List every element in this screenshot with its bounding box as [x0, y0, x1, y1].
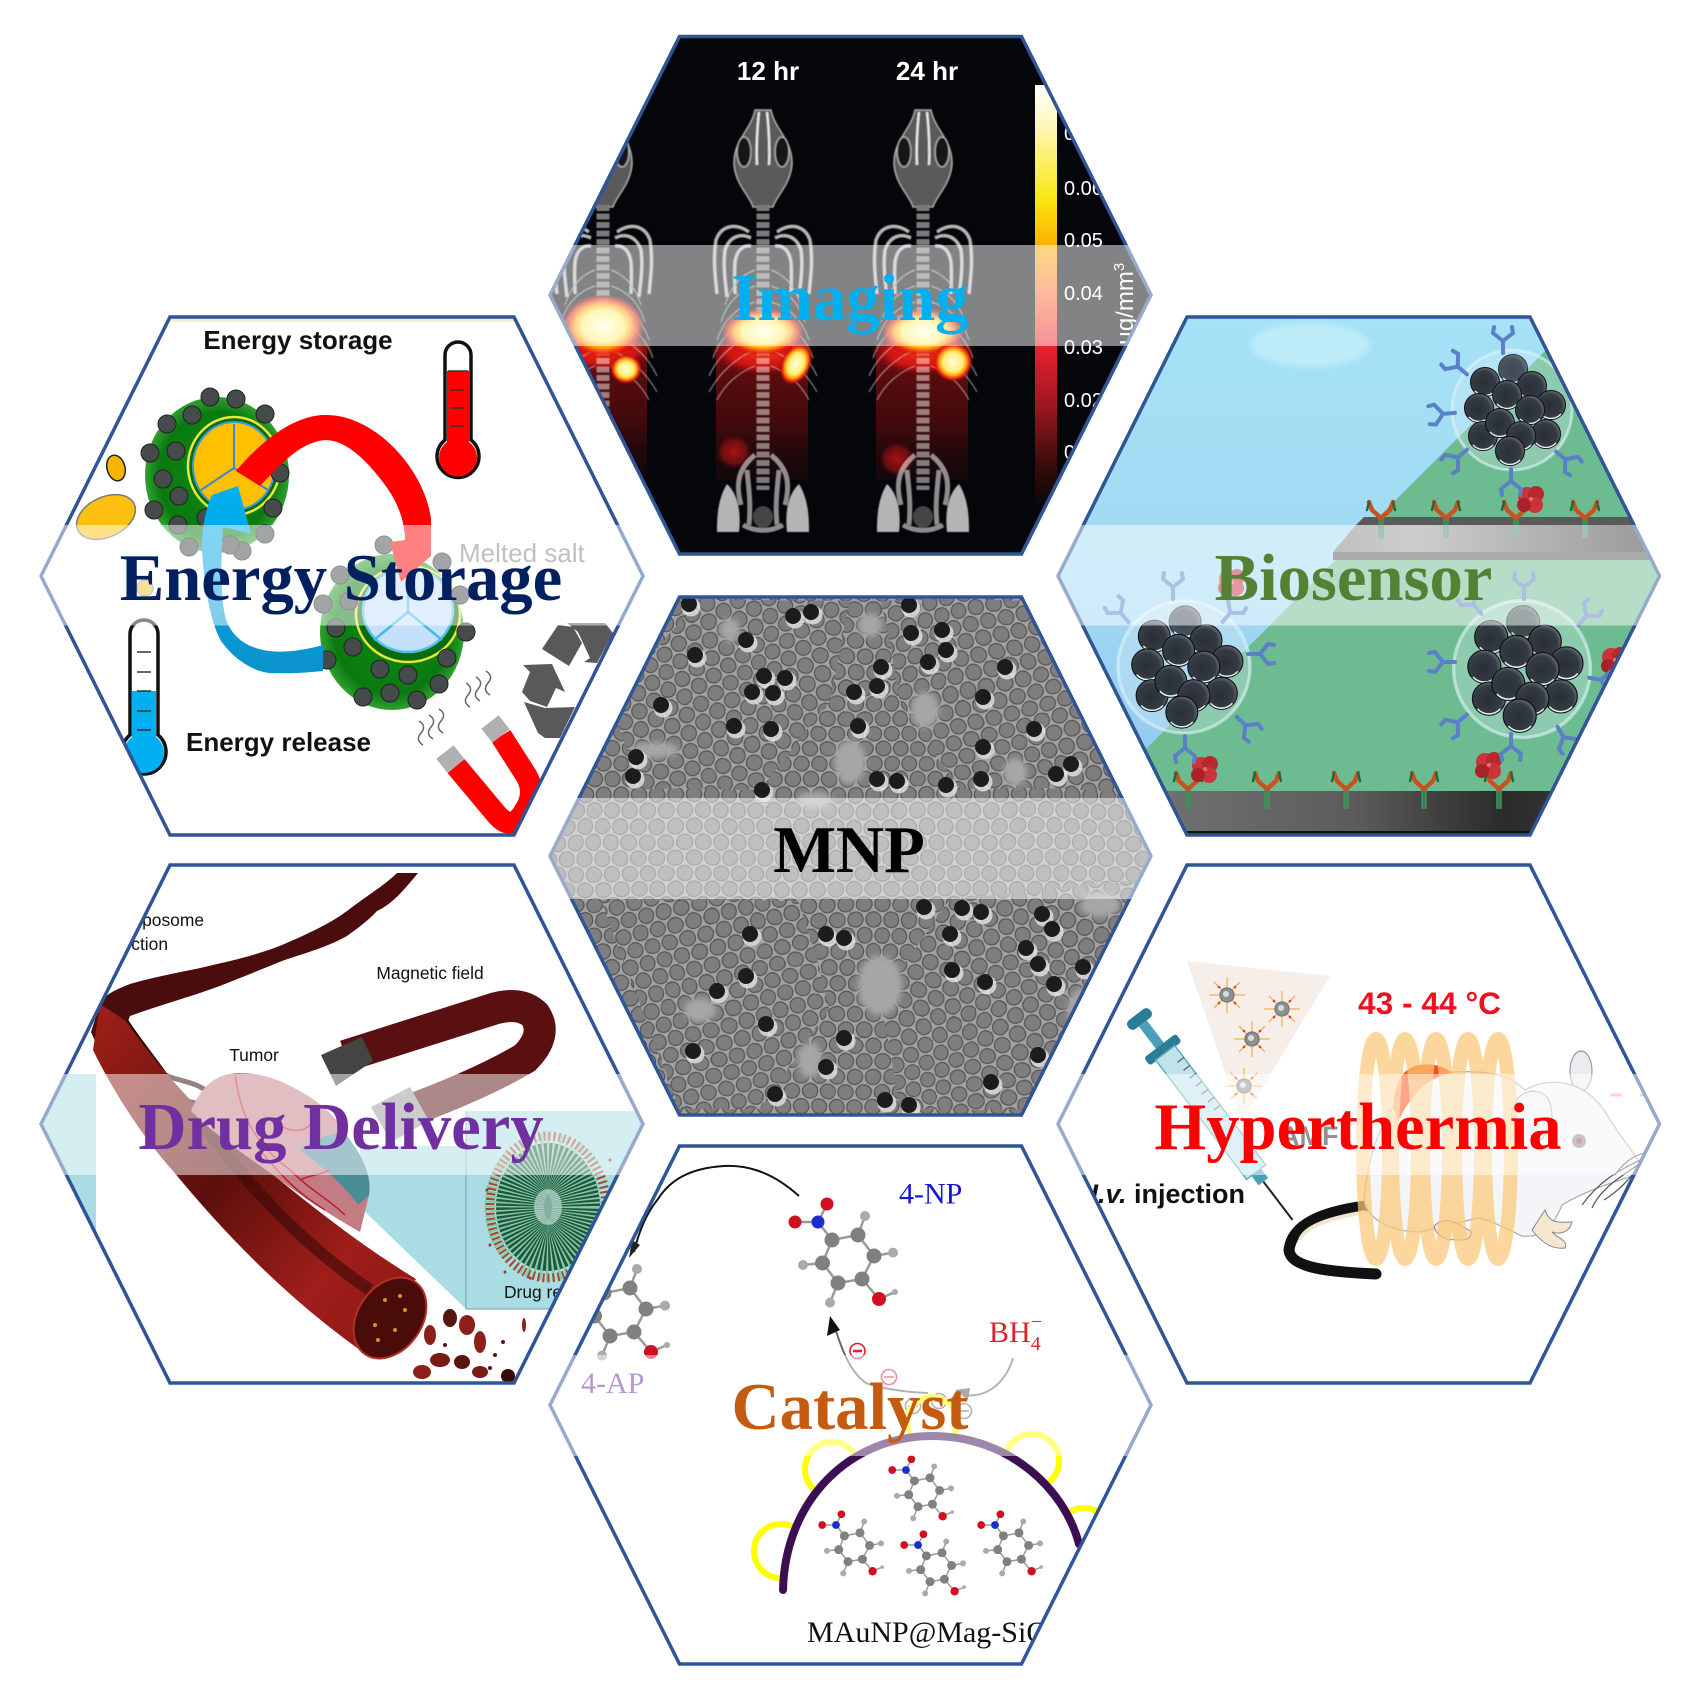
reaction arc: 4-NP to 4-AP [629, 1166, 799, 1258]
icon: hot thermometer [437, 342, 479, 477]
scale unit: μg/mm [1112, 271, 1139, 345]
label: BH4-: BH [989, 1316, 1031, 1349]
panel: biosensor [1050, 310, 1670, 840]
labels: injection [104, 934, 168, 954]
gold seeds [754, 1397, 1111, 1578]
label: BH4-: − [1031, 1311, 1042, 1333]
dark nanoparticles [625, 596, 1094, 1118]
label: injection: I.v. injection [1090, 1179, 1245, 1209]
icon: recycling [522, 623, 613, 738]
panel: hyperthermia [1050, 865, 1670, 1383]
capsule: charged [141, 388, 289, 560]
icon: syringe [1120, 1003, 1308, 1232]
tumor [191, 1073, 370, 1232]
mouse tail [1289, 1206, 1376, 1274]
color scale labels: 0.01 [1064, 442, 1103, 464]
bare grid patches [631, 613, 1120, 1078]
title: Biosensor: Biosensor [1215, 542, 1492, 615]
panel: imaging [540, 30, 1160, 560]
mouse [1364, 1051, 1660, 1248]
panel: catalyst [540, 1146, 1160, 1664]
scale unit: 3 [1111, 263, 1128, 271]
electron transfer arrows [827, 1316, 1013, 1400]
label: AMF: AMF [1280, 1121, 1338, 1151]
panel: mnp [548, 595, 1153, 1117]
silica shell arc [783, 1436, 1090, 1590]
title: Catalyst: Catalyst [732, 1371, 968, 1444]
title: Hyperthermia: Hyperthermia [1154, 1091, 1562, 1164]
labels: Magnetic field [376, 963, 484, 983]
nanoparticle inset [1187, 961, 1330, 1121]
label: melted salt: Melted salt [459, 538, 585, 568]
cluster: bottom left [1104, 573, 1274, 762]
capture antibodies [1174, 502, 1599, 808]
icon: magnet [418, 671, 531, 823]
label: catalyst name: MAuNP@Mag-SiO2 [807, 1616, 1063, 1649]
labels: Liposome [129, 910, 204, 930]
icon: salt droplets [69, 453, 153, 596]
arrow: energy release [202, 486, 323, 673]
nanoparticle field [552, 598, 1149, 1114]
panel: energy storage [35, 317, 650, 835]
icon: cold thermometer [122, 620, 166, 774]
title: MNP: MNP [773, 814, 925, 887]
cluster: bottom right [1429, 573, 1617, 760]
magnet [321, 1006, 540, 1142]
labels: Drug release [504, 1282, 604, 1302]
liposome nanoparticle [486, 1136, 612, 1280]
encapsulated molecules [818, 1455, 1043, 1596]
cluster: top right [1428, 327, 1582, 495]
title: Imaging: Imaging [731, 262, 969, 335]
electron symbols [850, 1344, 972, 1418]
panel: drug delivery [30, 865, 650, 1383]
blood vessel [91, 873, 441, 1372]
color scale labels: 0.05 [1064, 230, 1103, 252]
time label 12 hr: 12 hr [737, 56, 799, 86]
label: temperature: 43 - 44 °C [1358, 985, 1501, 1021]
arrow: energy storage [236, 415, 431, 582]
color scale labels: 0.03 [1064, 337, 1103, 359]
color scale labels: 0.02 [1064, 390, 1103, 412]
capsule: discharged [314, 536, 475, 710]
teal background panels [30, 1074, 650, 1309]
upper sensor bar [1333, 517, 1665, 560]
lower sensor bar [1167, 791, 1550, 834]
label: energy release: Energy release [186, 727, 371, 757]
molecule: 4-NP [788, 1198, 898, 1308]
color scale labels: 0.07 [1064, 123, 1103, 145]
title: Drug Delivery: Drug Delivery [138, 1091, 544, 1164]
time label 24 hr: 24 hr [896, 56, 958, 86]
faint dashes [1610, 1094, 1652, 1096]
label: BH4-: 4 [1031, 1333, 1041, 1355]
label: energy storage: Energy storage [203, 325, 393, 355]
label: 4-AP: 4-AP [581, 1367, 644, 1400]
color scale bar [1035, 85, 1057, 510]
molecule: 4-AP [560, 1250, 670, 1361]
title: Energy Storage: Energy Storage [120, 542, 562, 615]
label: 4-NP: 4-NP [899, 1178, 962, 1211]
color scale labels [1064, 123, 1103, 464]
antigens [1191, 486, 1628, 783]
labels [104, 910, 604, 1302]
color scale labels: 0.06 [1064, 178, 1103, 200]
tumor on mouse [1394, 1064, 1452, 1122]
labels: Tumor [229, 1045, 279, 1065]
blood cells [413, 1309, 526, 1383]
color scale labels: 0.04 [1064, 283, 1103, 305]
magnetic coil [1363, 1039, 1511, 1259]
